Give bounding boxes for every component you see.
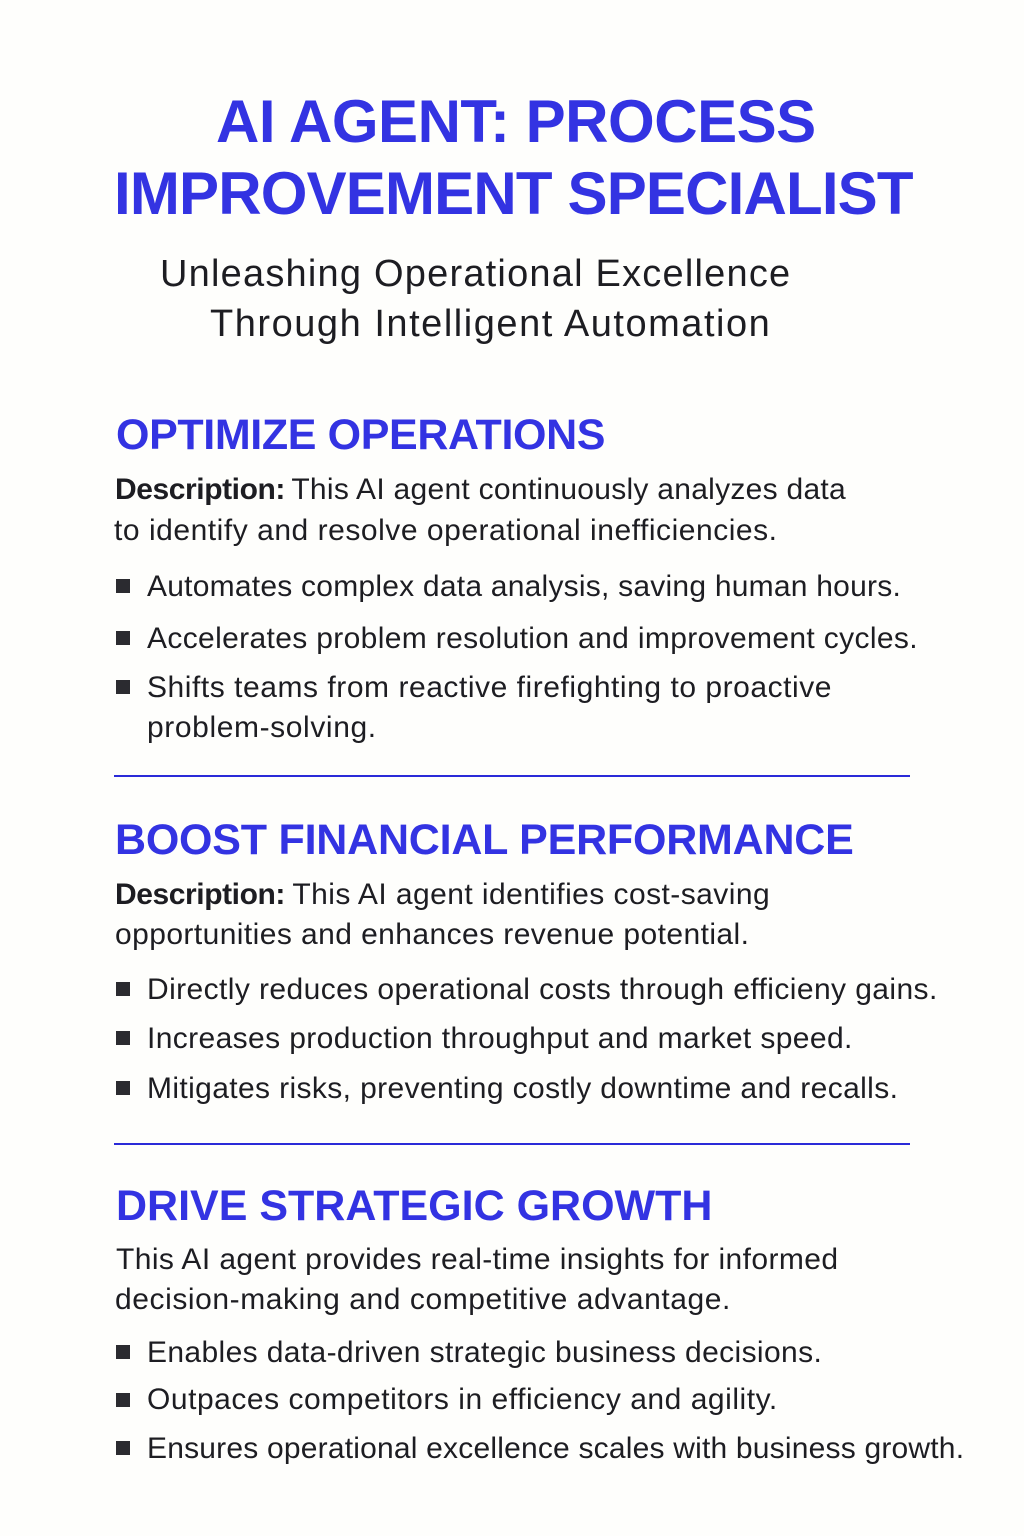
- bullet list: Outpaces competitors in efficiency and agility.: [147, 1383, 778, 1416]
- bullet list: Ensures operational excellence scales with business growth.: [147, 1432, 964, 1465]
- heading: optimize operations: OPTIMIZE OPERATIONS: [116, 411, 605, 459]
- bullet list: [116, 1336, 964, 1465]
- description: [114, 473, 846, 547]
- description: decision-making and competitive advantage.: [115, 1283, 731, 1316]
- title: IMPROVEMENT SPECIALIST: [114, 160, 913, 227]
- bullet list: Increases production throughput and market speed.: [147, 1022, 853, 1055]
- bullet list: Mitigates risks, preventing costly downtime and recalls.: [147, 1072, 898, 1105]
- bullet list: Accelerates problem resolution and improvement cycles.: [147, 622, 918, 655]
- description: Description: This AI agent continuously analyzes data: [115, 473, 846, 506]
- panel: drive strategic growth: [115, 1182, 964, 1465]
- subtitle: Unleashing Operational Excellence: [160, 253, 791, 295]
- panel: boost financial performance: [115, 816, 938, 1105]
- bullet list: Shifts teams from reactive firefighting to proactive: [147, 671, 832, 704]
- description: [115, 878, 770, 951]
- description: opportunities and enhances revenue potential.: [115, 918, 749, 951]
- bullet list: Directly reduces operational costs through efficieny gains.: [147, 973, 938, 1006]
- bullet list: Enables data-driven strategic business decisions.: [147, 1336, 822, 1369]
- panel: optimize operations: [114, 411, 918, 744]
- description: Description: This AI agent identifies cost-saving: [115, 878, 770, 911]
- description: This AI agent provides real-time insights for informed: [116, 1243, 838, 1276]
- bullet list: problem-solving.: [147, 711, 377, 744]
- heading: drive strategic growth: DRIVE STRATEGIC GROWTH: [116, 1182, 712, 1230]
- bullet list: [116, 570, 918, 744]
- description: [115, 1243, 838, 1316]
- description: to identify and resolve operational inefficiencies.: [114, 514, 778, 547]
- subtitle: Through Intelligent Automation: [210, 303, 771, 345]
- bullet list: Automates complex data analysis, saving human hours.: [147, 570, 901, 603]
- title: [114, 88, 913, 227]
- heading: boost financial performance: BOOST FINANCIAL PERFORMANCE: [115, 816, 854, 864]
- title: AI AGENT: PROCESS: [216, 88, 816, 155]
- subtitle: [160, 253, 791, 345]
- bullet list: [116, 973, 938, 1105]
